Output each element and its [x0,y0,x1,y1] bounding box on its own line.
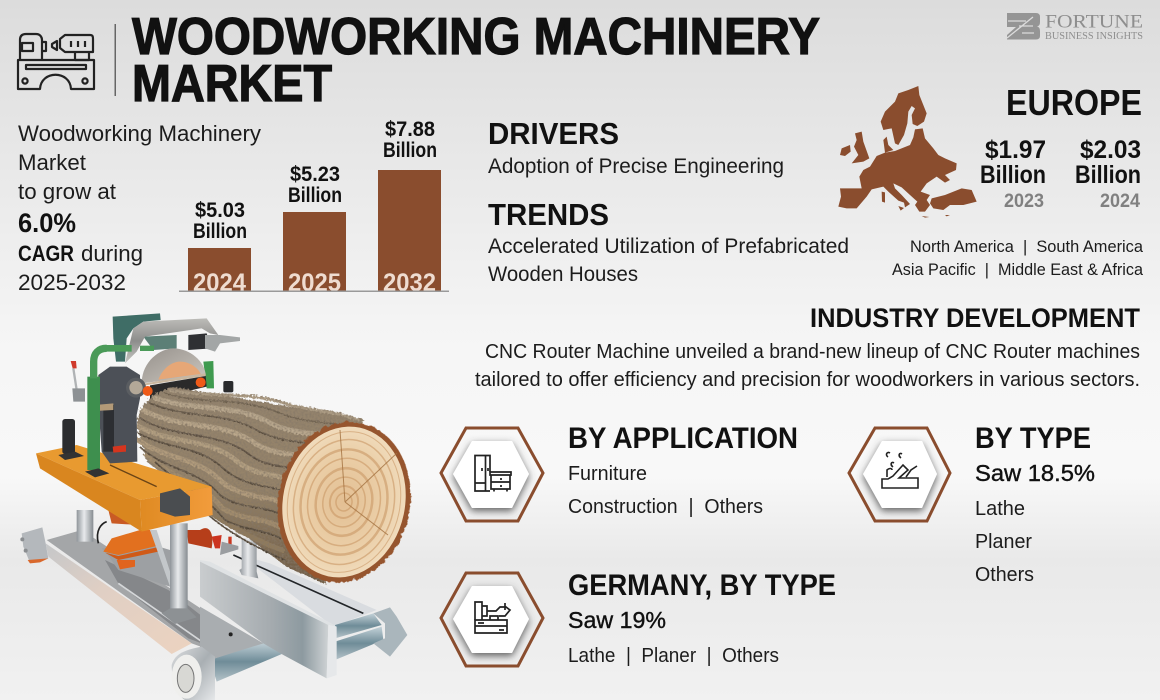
Germany by type [568,569,836,667]
bar 2024 [188,199,251,297]
Germany by type: GERMANY, BY TYPE [568,569,836,602]
industry development: INDUSTRY DEVELOPMENT [810,303,1140,333]
logo: Fortune Business Insights: FORTUNE [1045,12,1143,32]
front wheel [172,647,215,700]
bar 2025: 2025 [288,269,341,297]
CAGR text block: during [81,241,143,266]
title [132,8,820,113]
by type: BY TYPE [975,422,1091,455]
bar 2025: $5.23 [290,163,340,186]
CAGR text block: CAGR [18,241,74,266]
orange motor, struts and front pillar [77,510,232,624]
by application [568,422,798,518]
hexagon icon: Germany machine [441,573,543,666]
by application: BY APPLICATION [568,422,798,455]
by type: Saw 18.5% [975,460,1095,486]
CAGR text block: Woodworking Machinery [18,121,261,146]
bar 2032: $7.88 [385,118,435,141]
industry development: tailored to offer efficiency and precision for woodworkers in various sectors. [475,369,1140,391]
by type [975,422,1095,586]
machine base plate and rail [20,527,228,657]
log bark [137,387,363,584]
Europe 2023 value: Billion [980,161,1046,189]
CAGR text block: Market [18,150,86,175]
Europe heading: EUROPE [1006,82,1142,123]
bar 2032: 2032 [383,269,436,297]
by type: Lathe [975,498,1025,520]
CAGR text block: 6.0% [18,208,76,238]
Europe 2023 value [980,136,1046,212]
hexagon icon: furniture [441,428,543,521]
Europe 2024 value: 2024 [1100,191,1140,212]
by type: Planer [975,531,1032,553]
trends: Wooden Houses [488,263,638,286]
Germany by type: Lathe | Planer | Others [568,645,779,667]
icon: lathe machine [18,34,94,89]
bar 2025 [283,163,346,297]
illustration: log on sawmill machine [20,313,425,700]
by application: Construction | Others [568,496,763,518]
trends [488,197,849,286]
logo: Fortune Business Insights [1007,12,1143,42]
Europe 2024 value: $2.03 [1080,136,1141,164]
rear rail, rollers, bracket and beam [200,538,407,682]
industry development [475,303,1140,391]
title: WOODWORKING MACHINERY [132,8,820,66]
log end rings [263,409,425,595]
by type: Others [975,564,1034,586]
title: MARKET [132,55,332,113]
other regions [892,237,1144,279]
bar 2024: Billion [193,220,247,243]
Europe 2023 value: 2023 [1004,191,1044,212]
divider [114,24,116,96]
bar chart [179,118,449,297]
CAGR text block [18,121,261,295]
red clamp [212,535,238,555]
map: Europe [838,86,977,218]
bar 2032: Billion [383,139,437,162]
Germany by type: Saw 19% [568,607,666,633]
Europe 2023 value: $1.97 [985,136,1046,164]
teal box, arm and saw guard [105,313,240,400]
other regions: North America | South America [910,237,1144,256]
trends: TRENDS [488,197,609,232]
CAGR text block: to grow at [18,179,116,204]
by application: Furniture [568,463,647,485]
drivers: DRIVERS [488,116,619,151]
orange table, posts and saw head [36,348,213,532]
bar 2032 [378,118,441,297]
drivers: Adoption of Precise Engineering [488,155,784,178]
other regions: Asia Pacific | Middle East & Africa [892,260,1144,279]
bar 2024: $5.03 [195,199,245,222]
industry development: CNC Router Machine unveiled a brand-new lineup of CNC Router machines [485,341,1140,363]
Europe 2024 value [1075,136,1141,212]
CAGR text block: 2025-2032 [18,270,126,295]
drivers [488,116,784,178]
Europe 2024 value: Billion [1075,161,1141,189]
bar 2024: 2024 [193,269,246,297]
hexagon icon: type [849,428,950,521]
log end cracks [340,430,397,535]
logo: Fortune Business Insights: BUSINESS INSIGHTS [1045,31,1143,42]
trends: Accelerated Utilization of Prefabricated [488,235,849,258]
bar 2025: Billion [288,184,342,207]
